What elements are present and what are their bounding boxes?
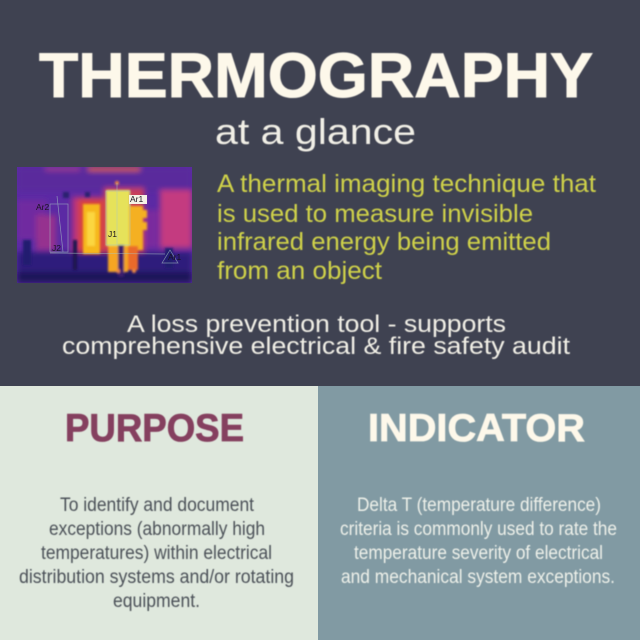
panel: indicator bbox=[318, 386, 640, 640]
panel: purpose bbox=[0, 386, 318, 640]
purpose body text bbox=[19, 495, 294, 612]
purpose body text: distribution systems and/or rotating bbox=[19, 567, 294, 588]
indicator body text: temperature severity of electrical bbox=[354, 543, 603, 564]
purpose body text: exceptions (abnormally high bbox=[49, 519, 265, 540]
tagline: A loss prevention tool - supports bbox=[127, 311, 506, 338]
thermal image: J2 bbox=[52, 243, 61, 253]
tagline bbox=[62, 311, 570, 360]
indicator body text: Delta T (temperature difference) bbox=[357, 495, 601, 516]
definition text: A thermal imaging technique that bbox=[217, 170, 596, 198]
indicator body text: criteria is commonly used to rate the bbox=[340, 519, 617, 540]
purpose body text: temperatures) within electrical bbox=[41, 543, 272, 564]
indicator body text: and mechanical system exceptions. bbox=[341, 567, 615, 588]
thermal image: Ar1 bbox=[168, 252, 182, 262]
subtitle: at a glance bbox=[215, 111, 416, 152]
purpose body text: equipment. bbox=[113, 591, 200, 612]
indicator body text bbox=[340, 495, 617, 588]
background: dark header panel bbox=[0, 0, 640, 386]
definition text: from an object bbox=[217, 257, 382, 285]
indicator heading: INDICATOR bbox=[368, 407, 585, 450]
tagline: comprehensive electrical & fire safety audit bbox=[62, 333, 570, 360]
purpose heading: PURPOSE bbox=[65, 407, 244, 450]
definition text: infrared energy being emitted bbox=[217, 228, 551, 256]
definition text bbox=[217, 170, 596, 285]
thermal image: Ar1 bbox=[130, 194, 144, 204]
purpose body text: To identify and document bbox=[60, 495, 255, 516]
definition text: is used to measure invisible bbox=[217, 200, 533, 228]
thermal image: Ar2 bbox=[36, 202, 50, 212]
title: THERMOGRAPHY bbox=[39, 41, 593, 111]
thermal image bbox=[17, 167, 192, 283]
thermal image: J1 bbox=[108, 229, 117, 239]
